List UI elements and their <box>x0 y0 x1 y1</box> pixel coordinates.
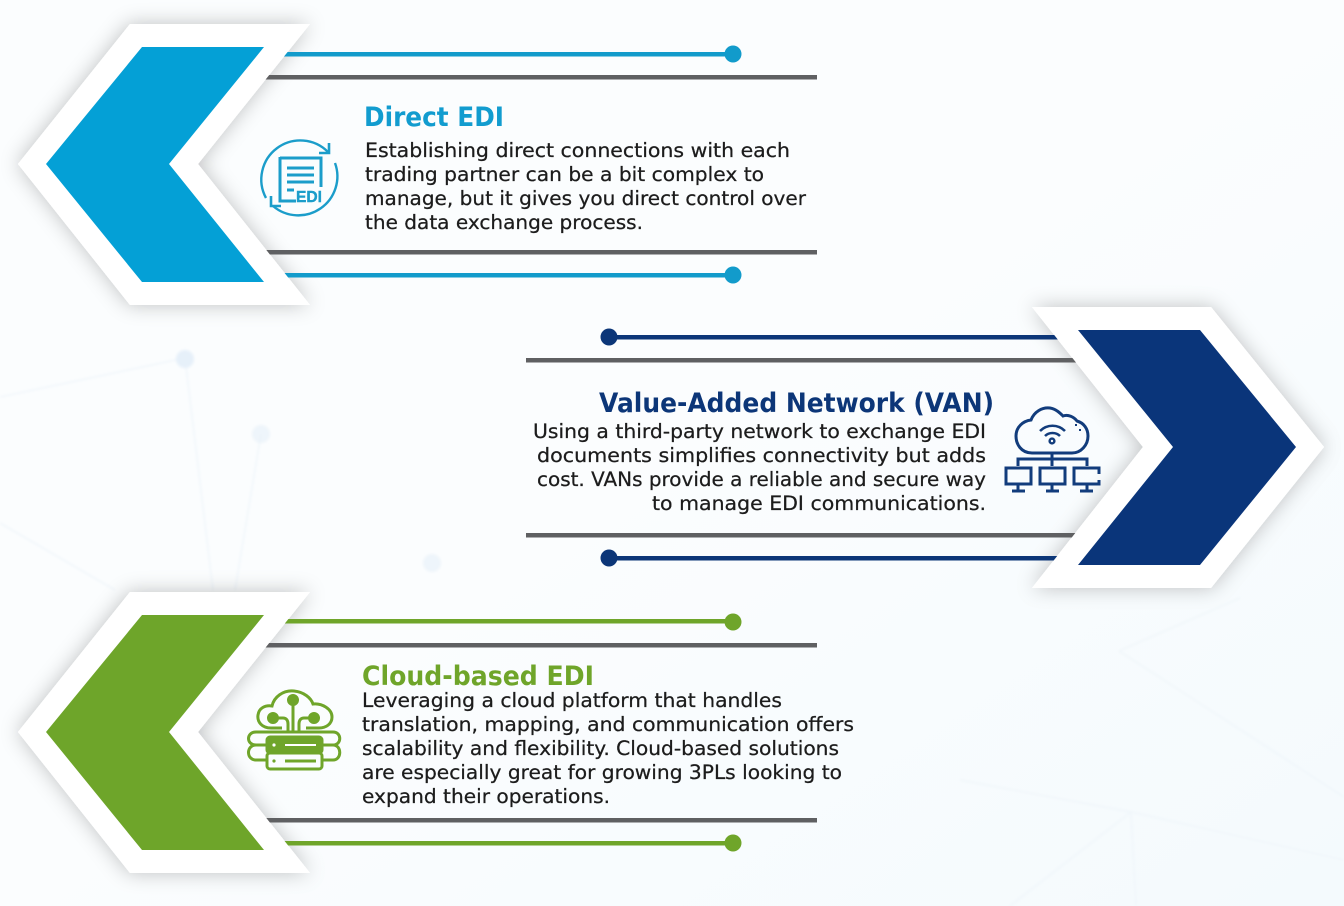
text block: Cloud-based EDI description <box>362 689 854 808</box>
heading: Cloud-based EDI: Cloud-based EDI <box>362 661 594 692</box>
icon: cloud with server stack <box>248 691 340 769</box>
text block: Direct EDI description: the data exchange process. <box>365 211 643 234</box>
chevron: Direct EDI <box>18 24 310 305</box>
connector lines: Direct EDI <box>250 46 817 284</box>
text block: Cloud-based EDI description: translation, mapping, and communication offers <box>362 713 854 736</box>
text block: Cloud-based EDI description: scalability and flexibility. Cloud-based solutions <box>362 737 839 760</box>
text block: Direct EDI description: trading partner can be a bit complex to <box>365 163 764 186</box>
text block: VAN description: to manage EDI communications. <box>652 492 986 515</box>
panel: Cloud-based EDI <box>18 592 854 873</box>
heading: Direct EDI: Direct EDI <box>364 102 504 133</box>
connector lines: VAN <box>526 328 1096 566</box>
panel: Direct EDI <box>18 24 817 305</box>
text block: VAN description: documents simplifies connectivity but adds <box>537 444 986 467</box>
text block: Direct EDI description <box>365 139 807 234</box>
text block: Direct EDI description: Establishing direct connections with each <box>365 139 790 162</box>
text block: VAN description <box>533 420 986 515</box>
text block: Cloud-based EDI description: expand their operations. <box>362 785 610 808</box>
text block: Cloud-based EDI description: Leveraging a cloud platform that handles <box>362 689 782 712</box>
connector lines: Cloud-based EDI <box>250 614 817 852</box>
text block: Direct EDI description: manage, but it gives you direct control over <box>365 187 807 210</box>
chevron: Cloud-based EDI <box>18 592 310 873</box>
icon: EDI document with cycle arrows <box>261 140 337 215</box>
text block: VAN description: cost. VANs provide a reliable and secure way <box>537 468 986 491</box>
panel: Value-Added Network (VAN) <box>526 307 1324 588</box>
text block: Cloud-based EDI description: are especially great for growing 3PLs looking to <box>362 761 842 784</box>
heading: VAN: Value-Added Network (VAN) <box>599 388 994 419</box>
text block: VAN description: Using a third-party network to exchange EDI <box>533 420 986 443</box>
chevron: VAN <box>1032 307 1324 588</box>
icon: cloud network with monitors <box>1006 408 1099 491</box>
icon: EDI document with cycle arrows: EDI <box>296 189 322 206</box>
